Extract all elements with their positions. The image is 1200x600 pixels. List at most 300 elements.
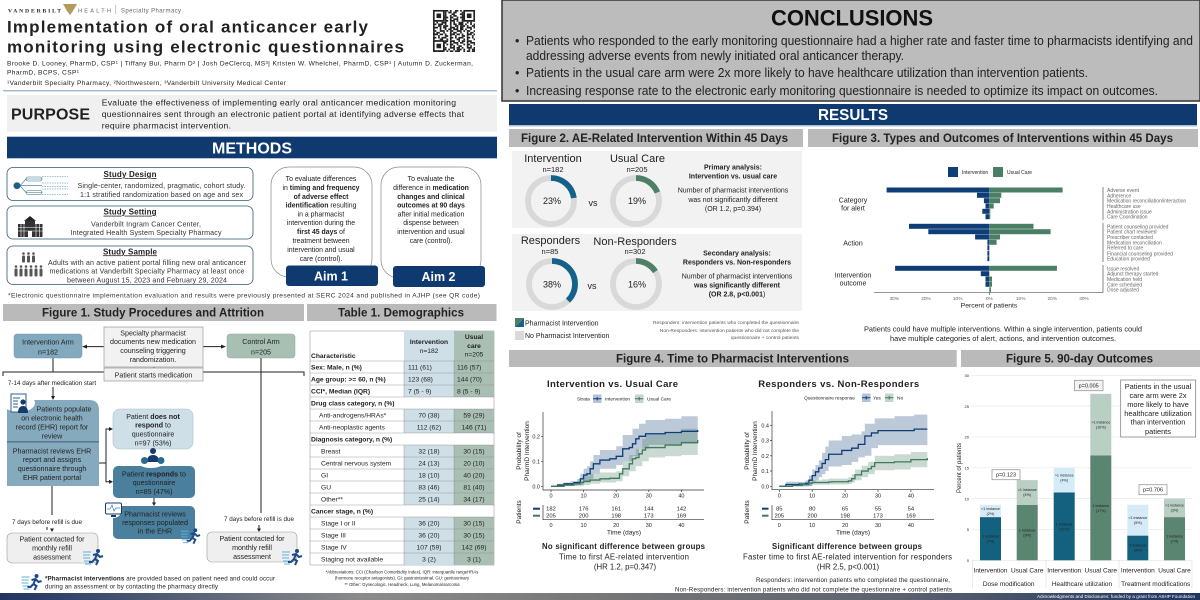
authors and affiliations: Brooke D. Looney, PharmD, CSP¹ | Tiffany Bui, Pharm D² | Josh DeClercq, MS³| Kristen W. Whelchel, PharmD, CSP¹ | Autumn D. Zuckerman, [7, 61, 473, 68]
box: patient does not respond: Patient does not [126, 413, 180, 421]
callout: healthcare utilization: more likely to have [1127, 400, 1189, 409]
chart: KM intervention vs usual care: Time (days) [607, 530, 641, 536]
panel: study setting: Integrated Health System Specialty Pharmacy [70, 229, 222, 237]
table: demographics: Breast [321, 448, 340, 455]
table: demographics: 144 (70) [457, 376, 482, 383]
box: patient does not respond [113, 409, 193, 449]
usual care bars [989, 188, 1063, 292]
panel: primary analysis: n=182 [542, 165, 564, 174]
chart: KM responders vs non-responders: 205 [774, 514, 784, 520]
box: EHR report: Patients populate [37, 406, 91, 414]
chart: 90-day outcomes stacked bars: 15 [965, 466, 970, 470]
callout: healthcare utilization: than intervention [1131, 418, 1185, 426]
gridlines [972, 375, 1192, 560]
table: demographics: Drug class category, n (%) [311, 400, 394, 407]
bar value labels: (7%) [1171, 540, 1178, 544]
category tick labels: Dose adjusted [1107, 288, 1139, 294]
bar value labels: >1 instance [1091, 420, 1110, 424]
group labels: Action [843, 240, 863, 248]
note: pharmacist interventions: during an assessment or by contacting the pharmacy directly [45, 584, 219, 590]
table: demographics: Intervention [410, 339, 448, 346]
panel: aim 2: changes and clinical [397, 194, 465, 201]
table: demographics: Age group: >= 60, n (%) [311, 376, 386, 383]
table: demographics: Anti-neoplastic agents [319, 424, 385, 431]
table footnote: ** Other: Gynecologic, Headneck, Lung, Melanoma/sarcoma [344, 582, 460, 587]
panel: aim 2: outcomes at 90 days [397, 202, 465, 210]
category tick labels: Financial counseling provided [1107, 251, 1173, 257]
x axis ticks: 10% [953, 296, 963, 302]
p-value boxes: p=0.123 [996, 473, 1016, 479]
caption: KM responders vs non-responders [743, 542, 952, 572]
x axis ticks: 10% [1016, 296, 1026, 302]
box: pharmacist reviews responses: in the EHR [138, 528, 172, 536]
category tick labels: Medication reconciliation [1107, 240, 1162, 246]
chart: 90-day outcomes stacked bars: 10 [965, 496, 970, 501]
panel: study sample: between August 15, 2023 and February 29, 2024 [67, 277, 227, 285]
label: 7 days before refill left: 7 days before refill is due [12, 519, 82, 526]
panel: secondary analysis: Number of pharmacist interventions [682, 274, 793, 280]
table: demographics: 112 (62) [417, 424, 441, 431]
chart: KM responders vs non-responders: 0 [778, 523, 781, 529]
logo: Vanderbilt Health Specialty Pharmacy: VANDERBILT [8, 8, 61, 14]
donut: responders 38% [529, 261, 575, 307]
axes [874, 187, 1103, 295]
x axis ticks: 20% [921, 296, 932, 302]
box: pharmacist reviews responses [113, 506, 195, 539]
category tick labels: Issue resolved [1107, 266, 1139, 272]
panel: primary analysis: was not significantly different [687, 197, 778, 204]
category tick labels: Care Coordination [1107, 215, 1148, 221]
table: demographics: 30 (15) [463, 532, 485, 539]
category tick labels: Administration issue [1107, 209, 1152, 215]
panel: study sample: Adults with an active patient portal filling new oral anticancer [48, 259, 247, 267]
table: demographics: n=182 [420, 348, 439, 355]
legend: donut colors: No Pharmacist Intervention [525, 333, 610, 340]
group labels: for alert [841, 206, 865, 212]
bar value labels: >1 instance [1128, 516, 1147, 520]
authors and affiliations: PharmD, BCPS, CSP¹ [7, 70, 80, 76]
panel: primary analysis: Primary analysis: [704, 164, 762, 172]
category tick labels: Patient chart reviewed [1107, 230, 1157, 236]
donut: usual care 19% [613, 178, 659, 224]
panel: secondary analysis: n=85 [542, 247, 558, 256]
category tick labels: Medication reconciliation/interaction [1107, 199, 1186, 205]
table: demographics: care [467, 343, 481, 350]
bar value labels: >1 instance [1055, 474, 1074, 478]
table: demographics: 3 (2) [422, 556, 436, 563]
panel: aim 2: Aim 2 [421, 270, 456, 284]
chart: 90-day outcomes stacked bars [957, 373, 1192, 588]
box: monthly refill right [207, 532, 297, 562]
panel: primary analysis: n=205 [626, 165, 648, 174]
box: intervention arm: n=182 [38, 348, 58, 356]
panel: aim 1: intervention during the [287, 220, 355, 227]
table: demographics: Other** [321, 496, 343, 503]
panel: aim 2: dispense between [403, 220, 459, 227]
chart: KM intervention vs usual care: 198 [611, 514, 621, 520]
table: demographics: 8 (5 - 9) [457, 388, 480, 395]
panel: aim 2: To evaluate the [408, 176, 455, 183]
box: EHR report: record (EHR) report for [16, 424, 89, 432]
icon: runner left [83, 549, 103, 565]
chart: KM intervention vs usual care: 182 [546, 507, 556, 513]
table: demographics: Staging not available [321, 556, 383, 563]
table: demographics: Anti-androgens/HRAs* [319, 412, 387, 419]
chart: 90-day outcomes stacked bars: 0 [967, 558, 970, 563]
bar value labels: (3%) [1171, 508, 1178, 512]
table: demographics: 25 (14) [418, 496, 440, 503]
heading: methods [7, 137, 497, 158]
table: demographics: Central nervous system [321, 460, 392, 467]
caption: figure 3 [864, 324, 1142, 343]
table: demographics: 40 (20) [463, 472, 485, 479]
chart: KM responders vs non-responders: 80 [809, 507, 815, 513]
panel: study sample: Study Sample [103, 247, 158, 256]
chart: KM intervention vs usual care: 161 [611, 507, 621, 513]
table: demographics: GI [321, 472, 328, 479]
heading: figure 5 [961, 350, 1200, 367]
caption: KM responders vs non-responders: Significant difference between groups [772, 542, 923, 551]
panel: aim 1: To evaluate differences [286, 176, 357, 183]
caption: figure 3: Patients could have multiple interventions. Within a single intervention, patients could [864, 324, 1142, 334]
box: EHR report [7, 400, 99, 486]
category tick labels: Healthcare use [1107, 204, 1141, 210]
chart: types and outcomes of interventions [835, 167, 1186, 310]
legend: donut colors: Pharmacist Intervention [525, 320, 599, 328]
heading: figure 2: Figure 2. AE-Related Intervention Within 45 Days [521, 133, 788, 145]
panel: purpose: Evaluate the effectiveness of implementing early oral anticancer medication monitoring [102, 98, 456, 108]
icon: QR code [433, 11, 475, 51]
panel: conclusions: Patients who responded to the early monitoring questionnaire had a higher rate and faster time to pharmacists identifying and [526, 34, 1193, 48]
panel: purpose: PURPOSE [11, 106, 90, 123]
x axis ticks: 30% [889, 296, 900, 302]
box: pharmacist reviews responses: responses populated [122, 519, 188, 527]
legend [948, 167, 1032, 177]
chart: KM intervention vs usual care: PharmD Intervention [524, 421, 531, 481]
box: patient responds: Patient responds to [122, 470, 186, 478]
bar value labels [981, 420, 1184, 552]
chart: KM responders vs non-responders: 10 [809, 494, 815, 500]
chart: KM responders vs non-responders: 10 [809, 523, 815, 529]
note: pharmacist interventions: *Pharmacist interventions are provided based on patient need and could occur [45, 575, 275, 582]
icon: monitor [104, 502, 122, 518]
panel: aim 2: difference in medication [393, 185, 469, 192]
x labels: Intervention [974, 567, 1008, 574]
table: demographics: 59 (29) [463, 412, 485, 419]
chart: KM responders vs non-responders: 30 [875, 523, 881, 529]
panel: secondary analysis: Responders vs. Non-responders [683, 260, 791, 266]
chart: types and outcomes of interventions: Percent of patients [961, 302, 1018, 310]
authors and affiliations: ¹Vanderbilt Specialty Pharmacy, ²Northwestern, ³Vanderbilt University Medical Center [7, 80, 287, 87]
group labels: Category [839, 198, 868, 204]
note: responder definitions: Non-Responders: intervention patients who did not complete the [660, 328, 799, 334]
legend: donut colors [515, 318, 610, 340]
box: monthly refill left [7, 533, 98, 563]
box: EHR report: on electronic health [21, 414, 83, 422]
legend [804, 394, 903, 402]
donut: non-responders 16% [613, 261, 659, 307]
caption: KM intervention vs usual care: (HR 1.2, p=0.347) [594, 562, 656, 572]
box: monthly refill left: Patient contacted for [19, 536, 85, 544]
footer: acknowledgments: Acknowledgments and Disclosures: funded by a grant from ASHP Foundation [1037, 594, 1195, 599]
panel: secondary analysis: (OR 2.8, p<0.001) [709, 292, 765, 298]
panel: aim 1: Aim 1 [314, 270, 348, 284]
box: monthly refill right: Patient contacted for [219, 535, 285, 543]
table: demographics: 81 (40) [463, 484, 485, 491]
heading: results: RESULTS [818, 107, 888, 124]
heading: figure 4: Figure 4. Time to Pharmacist Interventions [616, 353, 849, 365]
chart: KM intervention vs usual care: 205 [546, 514, 556, 520]
chart: KM responders vs non-responders: 173 [873, 514, 883, 520]
panel: aim 1: treatment between [292, 238, 350, 245]
panel: conclusions: • [515, 84, 519, 98]
chart: KM responders vs non-responders: Patients [744, 500, 751, 524]
label: 7-14 days: 7-14 days after medication start [8, 380, 96, 387]
table: demographics: 36 (20) [418, 532, 440, 539]
logo: Vanderbilt Health Specialty Pharmacy: Specialty Pharmacy [121, 8, 181, 14]
panel: secondary analysis: vs [588, 281, 597, 291]
panel: purpose: questionnaires sent through an electronic patient portal at identifying adverse effects that [102, 109, 465, 119]
box: patient does not respond: n=97 (53%) [135, 439, 171, 447]
donut: non-responders 16%: 16% [628, 280, 646, 290]
donut: responders 38%: 38% [543, 280, 561, 290]
bar value labels: (11%) [1059, 528, 1069, 532]
bars [980, 394, 1185, 560]
chart: KM responders vs non-responders: Time (days) [836, 530, 870, 536]
table: demographics: Stage III [321, 532, 346, 539]
panel: aim 1: in timing and frequency [283, 185, 360, 192]
table: demographics: 30 (15) [463, 448, 485, 455]
bar value labels: 1 instance [1092, 504, 1109, 508]
table: demographics: Usual [465, 334, 483, 341]
bar value labels: (5%) [1134, 521, 1142, 525]
table: demographics: n=205 [465, 352, 484, 358]
box: control arm: Control Arm [242, 338, 280, 346]
caption: KM responders vs non-responders: (HR 2.5, p<0.001) [817, 562, 879, 572]
heading: table 1: Table 1. Demographics [338, 307, 464, 319]
chart: KM intervention vs usual care: 144 [644, 507, 654, 513]
confidence bands [551, 416, 698, 486]
category tick labels: Adherence [1107, 193, 1131, 199]
table: demographics: Diagnosis category, n (%) [311, 436, 392, 443]
caption: KM intervention vs usual care [542, 542, 706, 572]
category tick labels: Adverse event [1107, 188, 1140, 194]
icon: patient choice [135, 448, 167, 468]
note: KM definitions: Responders: intervention patients who completed the questionnaire, [756, 577, 950, 584]
group labels: Intervention [835, 272, 871, 280]
x labels: Intervention [1121, 567, 1155, 574]
caption: KM intervention vs usual care: No significant difference between groups [542, 542, 706, 551]
panel: aim 1: identification resulting [286, 202, 357, 210]
label: 7 days before refill right: 7 days before refill is due [224, 516, 294, 523]
box: patient does not respond: respond to [135, 422, 171, 430]
chart: KM intervention vs usual care: 0.2 [532, 434, 540, 440]
risk table [772, 505, 934, 520]
panel: secondary analysis: Secondary analysis: [703, 250, 771, 258]
chart: 90-day outcomes stacked bars: 20 [965, 435, 970, 440]
note: responder definitions [653, 320, 800, 341]
table: demographics: 34 (17) [463, 496, 485, 503]
box: EHR report: EHR patient portal [23, 474, 81, 482]
chart: 90-day outcomes stacked bars: 25 [965, 404, 970, 409]
box: counseling trigger: documents new medication [110, 338, 196, 346]
chart: KM intervention vs usual care: 200 [579, 514, 588, 520]
chart: 90-day outcomes stacked bars: Percent of patients [957, 443, 963, 493]
box: counseling trigger [104, 327, 203, 367]
chart: KM responders vs non-responders: 198 [840, 514, 850, 520]
chart: KM responders vs non-responders: 169 [906, 514, 916, 520]
axes [541, 412, 704, 492]
note: responder definitions: questionnaire + control patients [731, 335, 800, 341]
title: monitoring using electronic questionnaires [7, 37, 404, 56]
box: EHR report: report and assigns [23, 456, 82, 464]
callout: healthcare utilization: healthcare utilization [1124, 409, 1192, 418]
icon: runner note [22, 574, 42, 590]
footnote: prior presentation: *Electronic questionnaire implementation evaluation and results were previously presented at SERC 2024 and published in AJHP (see QR code) [8, 293, 480, 300]
chart: 90-day outcomes stacked bars: 5 [967, 527, 970, 532]
legend: Strata [577, 396, 590, 402]
icon: decision tree [14, 176, 68, 194]
category tick labels [1107, 188, 1186, 294]
note: responder definitions: Responders: intervention patients who completed the questionnaire [653, 320, 799, 326]
x labels: Usual Care [1085, 567, 1117, 574]
chart: KM intervention vs usual care: 0 [549, 494, 553, 500]
chart: KM responders vs non-responders: 0.3 [761, 438, 769, 444]
box: patient starts medication [104, 368, 203, 381]
box: monthly refill left: assessment [33, 554, 71, 562]
table: demographics: 18 (10) [418, 472, 440, 479]
bar value labels: >1 instance [1165, 504, 1184, 508]
panel: primary analysis: Usual Care [610, 153, 665, 165]
group labels [835, 198, 871, 288]
heading: figure 1 [3, 304, 304, 321]
chart: 90-day outcomes stacked bars: 30 [965, 373, 970, 378]
chart: KM responders vs non-responders: 200 [807, 514, 817, 520]
panel: conclusions: • [515, 34, 519, 48]
chart: KM intervention vs usual care: 10 [581, 494, 587, 500]
panel: aim 1: of adverse effect [294, 194, 349, 201]
box: EHR report: review [42, 432, 63, 440]
table: demographics: 116 (57) [457, 364, 481, 371]
heading: figure 5: Figure 5. 90-day Outcomes [1006, 353, 1153, 365]
chart: KM intervention vs usual care: Intervention vs. Usual Care [547, 379, 678, 390]
chart: KM responders vs non-responders: 0.0 [761, 484, 769, 490]
chart: KM intervention vs usual care [516, 379, 704, 536]
x labels: Usual Care [1011, 567, 1044, 574]
chart: KM responders vs non-responders: 0.1 [761, 469, 769, 475]
heading: results [509, 104, 1197, 126]
icon: runner [181, 528, 200, 544]
caption: KM intervention vs usual care: Time to first AE-related intervention [559, 552, 689, 562]
table: demographics: GU [321, 484, 331, 491]
bar value labels: (10%) [1096, 426, 1106, 430]
risk table [543, 505, 704, 520]
panel: purpose [7, 95, 497, 132]
chart: KM responders vs non-responders: 20 [842, 523, 848, 529]
box: pharmacist reviews responses: Pharmacist reviews [124, 510, 186, 518]
table: demographics: 7 (5 - 9) [408, 388, 431, 395]
box: control arm: n=205 [251, 348, 271, 356]
table footnote: (hormone receptor antagonists), GI: gastrointestinal, GU: genitourinary [335, 576, 470, 580]
table: demographics: 83 (46) [418, 484, 440, 491]
authors and affiliations [7, 61, 473, 87]
box: control arm [227, 334, 295, 358]
legend [577, 394, 671, 403]
chart: KM intervention vs usual care: Probability of [516, 432, 523, 470]
box: EHR report: Pharmacist reviews EHR [13, 448, 91, 456]
box: monthly refill right: assessment [233, 553, 271, 561]
x labels: Healthcare utilization [1052, 581, 1113, 588]
box: counseling trigger: Specialty pharmacist [120, 330, 186, 338]
bar value labels: 1 instance [1129, 544, 1146, 548]
table: demographics: 107 (59) [417, 544, 441, 551]
panel: study design [7, 168, 253, 200]
chart: KM intervention vs usual care: 40 [678, 494, 684, 500]
chart: KM responders vs non-responders: 30 [875, 494, 881, 500]
title [7, 17, 404, 56]
x axis ticks: 0% [986, 296, 993, 302]
category tick labels: Education provided [1107, 257, 1150, 263]
icon: group of patients [14, 252, 42, 276]
chart: KM responders vs non-responders: 65 [842, 507, 848, 513]
bar value labels: (4%) [1060, 478, 1068, 482]
callout: healthcare utilization [1121, 380, 1196, 437]
x labels [974, 567, 1191, 588]
panel: conclusions: CONCLUSIONS [771, 6, 933, 30]
category tick labels: Patient counseling provided [1107, 224, 1169, 230]
chart: KM responders vs non-responders: 85 [776, 507, 783, 513]
note: KM definitions [675, 577, 952, 594]
chart: KM responders vs non-responders: 55 [875, 507, 881, 513]
panel: secondary analysis: Responders [521, 235, 581, 247]
table: demographics: 142 (69) [462, 544, 486, 551]
box: patient responds: questionnaire [133, 479, 175, 487]
panel: aim 1: in a pharmacist [298, 212, 344, 218]
chart: KM responders vs non-responders: Probability of [744, 432, 751, 470]
panel: aim 1: care (control). [300, 256, 342, 263]
bar value labels: (7%) [987, 540, 994, 544]
table: demographics: 32 (18) [418, 448, 440, 455]
heading: methods: METHODS [212, 140, 292, 157]
note: KM definitions: Non-Responders: intervention patients who did not complete the questionnaire + control patients [675, 586, 952, 594]
legend: Intervention [605, 396, 630, 402]
chart: KM responders vs non-responders: 20 [842, 494, 848, 500]
chart: KM intervention vs usual care: 10 [581, 523, 587, 529]
p-value boxes: p=0.005 [1079, 384, 1099, 390]
p-value boxes: p=0.706 [1143, 488, 1163, 494]
category tick labels: Care scheduled [1107, 282, 1142, 288]
bar value labels: (9%) [1023, 534, 1031, 538]
box: intervention arm [14, 334, 82, 358]
heading: figure 1: Figure 1. Study Procedures and Attrition [42, 307, 264, 319]
panel: aim 2: after initial medication [398, 212, 464, 218]
box: counseling trigger: randomization. [130, 356, 176, 364]
panel: conclusions: addressing adverse events from newly initiated oral anticancer therapy. [526, 49, 904, 63]
legend: Usual Care [1007, 170, 1032, 176]
box: intervention arm: Intervention Arm [22, 338, 74, 346]
table: demographics: Characteristic [311, 353, 356, 360]
x axis ticks: 20% [1047, 296, 1058, 302]
note: pharmacist interventions [45, 575, 275, 590]
table: demographics [310, 331, 494, 565]
bar value labels: 1 instance [1166, 534, 1183, 538]
table: demographics: 30 (15) [463, 520, 485, 527]
panel: conclusions [502, 0, 1200, 101]
bar value labels: >1 instance [1018, 488, 1037, 492]
panel: secondary analysis [512, 234, 802, 311]
chart: KM intervention vs usual care: 0.0 [532, 484, 540, 490]
chart: KM intervention vs usual care: 40 [678, 523, 684, 529]
